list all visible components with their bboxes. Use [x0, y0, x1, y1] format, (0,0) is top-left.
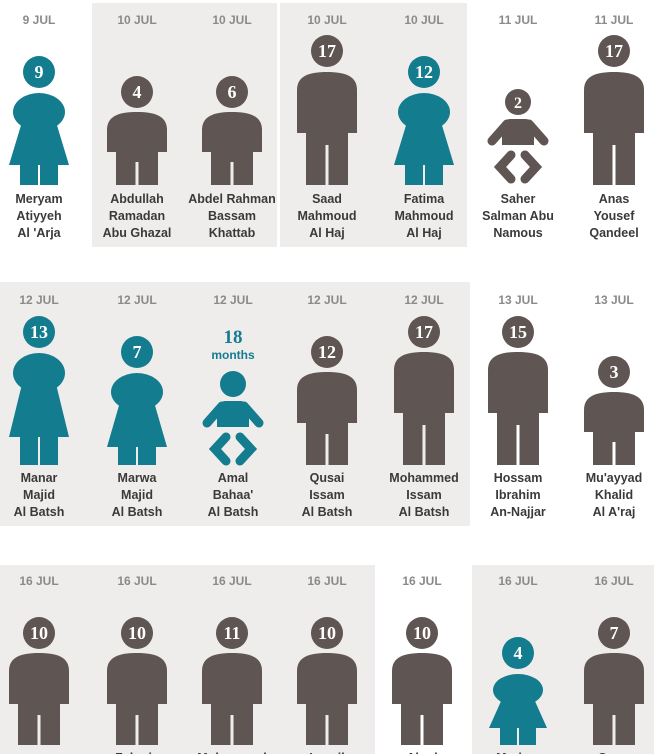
child: Abdel Rahman, 6: 6: [228, 82, 236, 102]
child: Abdel Rahman, 6: Khattab: [209, 226, 256, 240]
child: row3 col1, 10: 16 JUL: [19, 574, 59, 588]
child: Manar, 13: Al Batsh: [14, 505, 64, 519]
child: Ismail, 10: [297, 574, 357, 754]
child: Mu'ayyad, 3: [584, 293, 644, 519]
child: Anas, 17: 11 JUL: [595, 13, 633, 27]
child: Manar, 13: [9, 293, 69, 519]
child: girl, 4: [489, 574, 547, 754]
child: Abdullah, 4: [103, 13, 171, 240]
child: Fatima, 12: 10 JUL: [404, 13, 444, 27]
child: Manar, 13: 13: [30, 322, 48, 342]
child: Marwa, 7: 7: [132, 342, 142, 362]
child: Mu'ayyad, 3: 13 JUL: [594, 293, 634, 307]
child: Mohammed, 11: 11: [223, 623, 241, 643]
child: Saad, 17: 17: [318, 41, 336, 61]
child: Marwa, 7: Marwa: [118, 471, 157, 485]
child: Mohammed, 17: Issam: [406, 488, 442, 502]
child: row3 col1, 10: [9, 574, 69, 745]
child: Qusai, 12: 12 JUL: [307, 293, 347, 307]
child: Abdel Rahman, 6: Bassam: [208, 209, 256, 223]
child: Abdullah, 4: Abu Ghazal: [103, 226, 171, 240]
child: Qusai, 12: 12: [318, 342, 336, 362]
child: Ismail, 10: 16 JUL: [307, 574, 347, 588]
child: Saher, 2 (baby): Salman Abu: [482, 209, 554, 223]
child: Hossam, 15: An-Najjar: [490, 505, 546, 519]
child: Abdel Rahman, 6: Abdel Rahman: [188, 192, 276, 206]
child: Mohammed, 17: [389, 293, 459, 519]
child: Saher, 2 (baby): 2: [514, 95, 522, 112]
child: Abdullah, 4: Ramadan: [109, 209, 165, 223]
child: Zakaria, 10: 16 JUL: [117, 574, 157, 588]
child: Marwa, 7: [107, 293, 167, 519]
child: Amal, 18 months (baby): Amal: [218, 471, 248, 485]
child: Qusai, 12: Qusai: [310, 471, 344, 485]
child: Fatima, 12: Fatima: [404, 192, 445, 206]
child: Mu'ayyad, 3: Khalid: [595, 488, 633, 502]
child: Marwa, 7: Majid: [121, 488, 153, 502]
child: Saher, 2 (baby): 11 JUL: [499, 13, 537, 27]
child: Saad, 17: Saad: [312, 192, 342, 206]
child: Manar, 13: 12 JUL: [19, 293, 59, 307]
child: girl, 4: 16 JUL: [498, 574, 538, 588]
child: Anas, 17: Yousef: [594, 209, 635, 223]
child: Marwa, 7: Al Batsh: [112, 505, 162, 519]
child: row3 col7, 7: [584, 574, 644, 754]
child: row3 col1, 10: 10: [30, 623, 48, 643]
child: Fatima, 12: 12: [415, 62, 433, 82]
child: Qusai, 12: Al Batsh: [302, 505, 352, 519]
child: Meryam, 9: Al 'Arja: [17, 226, 62, 240]
child: Qusai, 12: Issam: [309, 488, 345, 502]
child: Manar, 13: Manar: [21, 471, 58, 485]
child: Abdullah, 4: 10 JUL: [117, 13, 157, 27]
child: Anas, 17: Qandeel: [589, 226, 639, 240]
child: Abdullah, 4: 4: [132, 82, 142, 102]
child: Hossam, 15: 13 JUL: [498, 293, 538, 307]
child: Amal, 18 months (baby): Al Batsh: [208, 505, 258, 519]
child: Mohammed, 11: [197, 574, 267, 754]
child: Anas, 17: [584, 13, 644, 240]
child: Saad, 17: 10 JUL: [307, 13, 347, 27]
child: Hossam, 15: Ibrahim: [495, 488, 541, 502]
child: Hossam, 15: Hossam: [494, 471, 542, 485]
child: Zakaria, 10: 10: [128, 623, 146, 643]
child: Mohammed, 17: 17: [415, 322, 433, 342]
child: Ahed, 10: [392, 574, 452, 754]
child: Abdel Rahman, 6: 10 JUL: [212, 13, 252, 27]
child: Ahed, 10: 16 JUL: [402, 574, 442, 588]
child: Amal, 18 months (baby): [207, 293, 259, 519]
child: Anas, 17: Anas: [599, 192, 629, 206]
child: Saad, 17: [297, 13, 357, 240]
child: Amal, 18 months (baby): 18: [224, 327, 242, 348]
child: Saad, 17: Al Haj: [309, 226, 345, 240]
child: Meryam, 9: Meryam: [15, 192, 63, 206]
child: Saher, 2 (baby): Namous: [493, 226, 543, 240]
child: Mohammed, 17: Mohammed: [389, 471, 459, 485]
child: Mu'ayyad, 3: 3: [610, 362, 618, 382]
child: Hossam, 15: 15: [509, 322, 527, 342]
child: Mohammed, 17: Al Batsh: [399, 505, 449, 519]
child: Meryam, 9: Atiyyeh: [16, 209, 62, 223]
child: Abdullah, 4: Abdullah: [110, 192, 164, 206]
child: Abdel Rahman, 6: [188, 13, 276, 240]
child: Marwa, 7: 12 JUL: [117, 293, 157, 307]
child: Meryam, 9: [9, 13, 69, 240]
child: Amal, 18 months (baby): Bahaa': [213, 488, 253, 502]
child: Fatima, 12: [394, 13, 454, 240]
child: Mohammed, 11: 16 JUL: [212, 574, 252, 588]
child: Anas, 17: 17: [605, 41, 623, 61]
child: Fatima, 12: Mahmoud: [394, 209, 454, 223]
child: Meryam, 9: 9 JUL: [23, 13, 55, 27]
child: Zakaria, 10: [107, 574, 167, 754]
child: Mu'ayyad, 3: Al A'raj: [593, 505, 635, 519]
child: Hossam, 15: [488, 293, 548, 519]
child: Fatima, 12: Al Haj: [406, 226, 442, 240]
child: Saher, 2 (baby): Saher: [501, 192, 536, 206]
child: Amal, 18 months (baby): 12 JUL: [213, 293, 253, 307]
child: Mu'ayyad, 3: Mu'ayyad: [586, 471, 642, 485]
child: row3 col7, 7: 7: [610, 623, 618, 643]
child: Ismail, 10: 10: [318, 623, 336, 643]
child: Manar, 13: Majid: [23, 488, 55, 502]
child: Saher, 2 (baby): [482, 13, 554, 240]
child: row3 col7, 7: 16 JUL: [594, 574, 634, 588]
child: Saad, 17: Mahmoud: [297, 209, 357, 223]
child: girl, 4: 4: [514, 643, 522, 663]
child: Ahed, 10: 10: [413, 623, 431, 643]
child: Amal, 18 months (baby): months: [211, 348, 255, 362]
child: Qusai, 12: [297, 293, 357, 519]
child: Meryam, 9: 9: [34, 62, 44, 82]
child: Mohammed, 17: 12 JUL: [404, 293, 444, 307]
